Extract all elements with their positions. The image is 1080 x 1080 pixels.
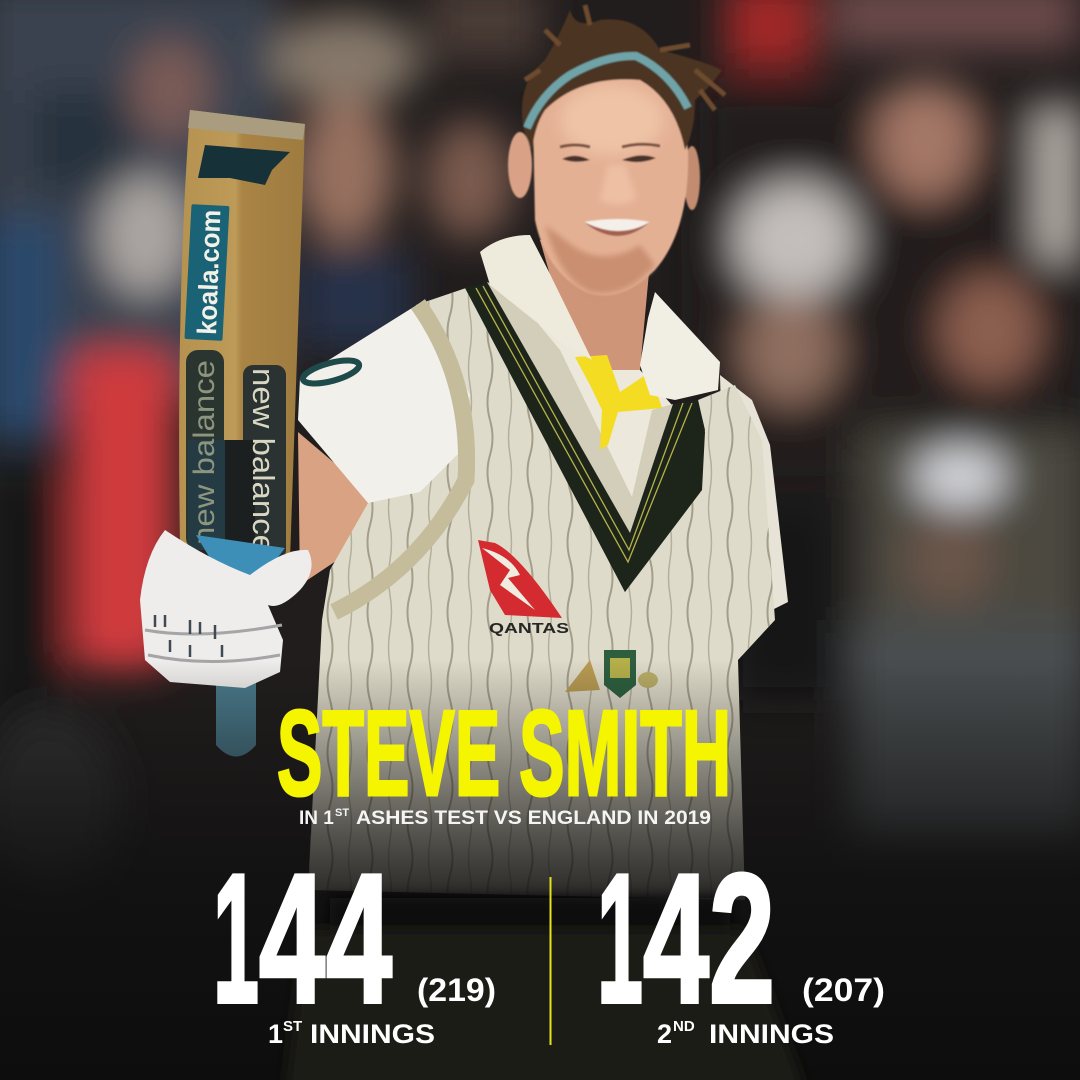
score 142 [597,835,775,1041]
stat: first innings [213,835,496,1049]
logo: Qantas [478,540,569,637]
player: armhole rib [334,304,467,612]
player: head [508,5,725,296]
bottom dark gradient over photo [0,660,1080,1080]
label 2nd innings [657,1018,834,1049]
cricket bat [179,110,305,756]
balls 207: (207) [802,972,885,1008]
player: left sleeve [298,303,470,503]
label 2nd innings: 2 [657,1019,672,1049]
label 2nd innings: INNINGS [709,1019,834,1049]
divider [550,877,552,1045]
subtitle: ASHES TEST VS ENGLAND IN 2019 [356,808,711,829]
player: arm [298,432,372,585]
player: right sleeve [720,375,788,622]
label 1st innings [268,1018,435,1049]
balls 219: (219) [417,972,496,1008]
cricket bat: new balance [188,360,221,545]
cricket bat: new balance [246,368,281,553]
bat: koala panel [184,204,229,341]
bat: lower panels [186,350,224,550]
cricket bat: koala.com [192,209,226,335]
logo: Qantas: QANTAS [489,620,569,637]
score 144 [213,835,392,1041]
label 1st innings: INNINGS [310,1019,435,1049]
label 1st innings: ST [283,1018,302,1035]
score 144: 1 [213,835,259,1041]
logo: sleeve [301,356,361,388]
player: cable-knit vest [308,288,775,900]
title: STEVE SMITH [277,685,731,821]
stat: second innings [597,835,885,1049]
label 1st innings: 1 [268,1019,283,1049]
player: V-neck trim [465,282,705,592]
score 142: 1 [597,835,643,1041]
trousers [285,898,805,1080]
bat: new balance logo [198,145,290,185]
player: yellow collar [575,355,662,450]
label 2nd innings: ND [673,1018,695,1035]
score 142: 4 [643,835,709,1041]
batting glove [140,530,312,688]
logo: Cricket Australia crest [565,650,658,698]
player: neck [540,240,652,380]
score 144: 4 [259,835,325,1041]
subtitle: IN 1 [299,808,334,829]
player photo illustration [140,5,788,900]
subtitle: ST [335,807,349,819]
score 142: 2 [709,835,775,1041]
score 144: 4 [326,835,392,1041]
player: collar [480,235,720,400]
player: undershirt [520,290,672,500]
